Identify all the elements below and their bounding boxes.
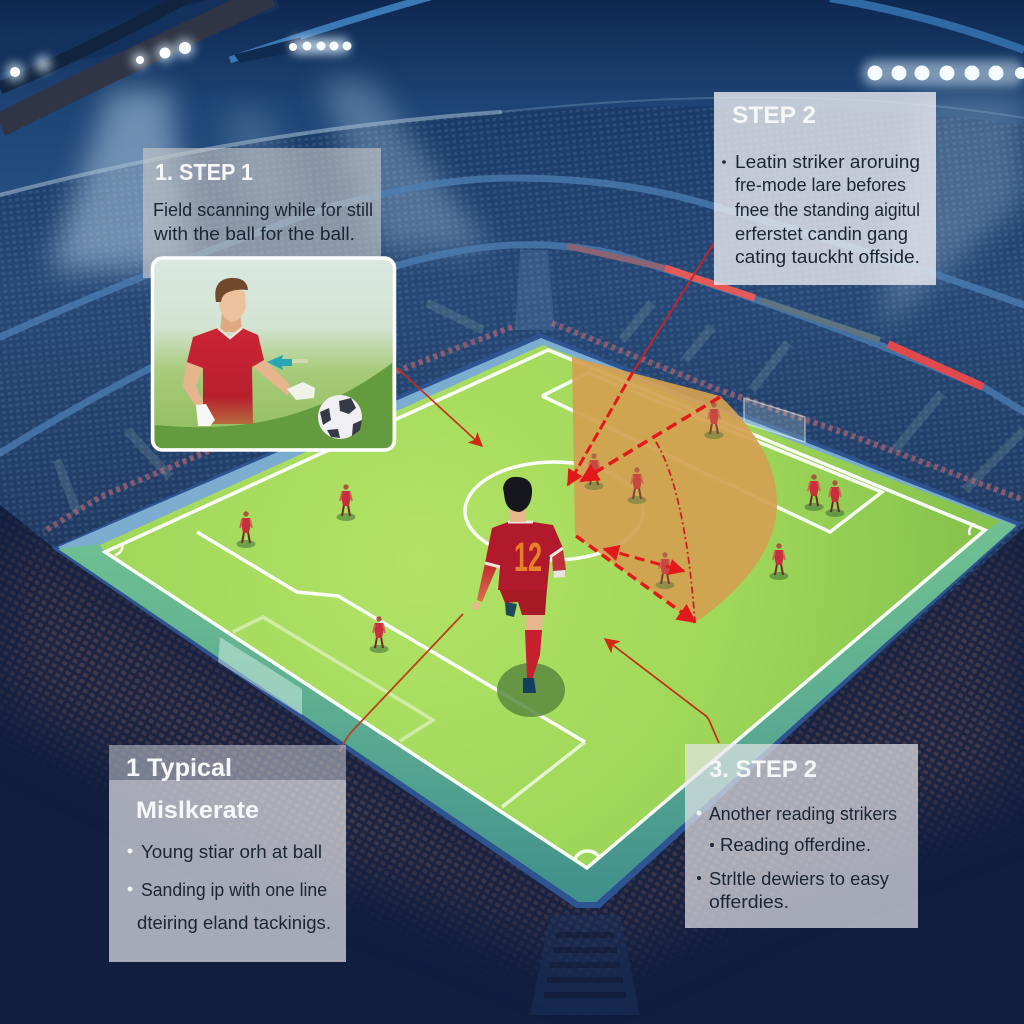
goal bottom left [218, 637, 302, 715]
step 2 bullet and body text: cating tauckht offside. [735, 247, 920, 267]
pitch surround [52, 333, 1022, 908]
wedge players [584, 402, 724, 589]
typical mistake bullets: Sanding ip with one line [141, 880, 327, 900]
typical mistake bullets [128, 842, 331, 933]
shorts [499, 588, 547, 615]
callout arrow from step 3 [605, 639, 719, 743]
panel: step 3 [685, 744, 918, 928]
shirt collar and sleeve trim [485, 522, 563, 567]
grass [100, 345, 1000, 868]
inset teal arrow [267, 355, 308, 370]
stand aisles [57, 303, 1024, 512]
step 2 bullet and body text: fre-mode lare befores [735, 175, 906, 195]
shaded offside wedge [572, 357, 777, 623]
double arrow across wedge [604, 549, 684, 571]
face [219, 288, 246, 322]
typical mistake heading [126, 754, 259, 824]
step 3 heading: 3. STEP 2 [709, 756, 817, 783]
dashed arrow from far player [581, 397, 720, 481]
light beams [50, 80, 1024, 330]
step 2 bullet and body text: Leatin striker aroruing [735, 152, 920, 172]
step 3 bullets: Reading offerdine. [720, 835, 871, 855]
arrow to striker from step 2 panel [633, 243, 714, 372]
central stairway [530, 915, 640, 1015]
goal top right [744, 398, 805, 442]
lower stands seating [0, 505, 1024, 966]
step 1 body text: with the ball for the ball. [153, 224, 355, 244]
step 3 bullets [696, 804, 897, 912]
step 3 bullets: offerdies. [709, 892, 789, 912]
step 1 body text [153, 200, 373, 244]
upper stands seating [0, 106, 1024, 619]
roof struts [0, 0, 1024, 125]
legs and boots [505, 602, 543, 693]
inset: player with ball [152, 258, 394, 450]
football [318, 395, 362, 439]
step 2 bullet and body text: erferstet candin gang [735, 224, 908, 244]
stand tier rings [0, 97, 1024, 453]
gloves [196, 404, 215, 426]
curved offside line [656, 442, 695, 622]
front row seats [43, 323, 1024, 532]
step 1 body text: Field scanning while for still [153, 200, 373, 220]
step 2 bullet and body text: fnee the standing aigitul [735, 200, 920, 220]
small players outfield [236, 474, 844, 653]
inset goalkeeper figure [183, 278, 315, 426]
typical mistake bullets: dteiring eland tackinigs. [137, 913, 331, 933]
number 12: 12 [514, 534, 542, 580]
teal apron [58, 520, 1016, 902]
typical mistake heading: Mislkerate [136, 797, 259, 824]
pitch [52, 333, 1022, 908]
panel: step 1 [143, 148, 381, 278]
floodlights left [6, 38, 352, 81]
step 2 heading: STEP 2 [732, 102, 816, 129]
arms [472, 549, 566, 610]
collar [218, 328, 242, 338]
main player number 12 [472, 477, 566, 717]
panel: step 2 [714, 92, 936, 285]
floodlights right [862, 60, 1024, 86]
callout arrow from typical mistake [340, 614, 463, 752]
player shadow [497, 663, 565, 717]
step 2 bullet and body text [722, 152, 920, 267]
advertising boards [567, 246, 983, 387]
neck and arms [220, 312, 242, 332]
head and hair [503, 477, 532, 522]
typical mistake bullets: Young stiar orh at ball [141, 842, 322, 862]
shirt [187, 328, 264, 424]
pitch markings [105, 350, 985, 868]
step 3 bullets: Strltle dewiers to easy [709, 869, 889, 889]
hair [215, 278, 248, 302]
callout arrow from step 1 [397, 368, 482, 446]
panel: typical mistake [109, 745, 346, 962]
tactical arrows [340, 243, 720, 752]
shirt [485, 522, 563, 590]
step 3 bullets: Another reading strikers [709, 804, 897, 824]
central tunnel glow [515, 250, 555, 330]
inset turf [155, 363, 392, 448]
step 1 heading: 1. STEP 1 [155, 159, 253, 185]
dashed line along wedge edge [576, 536, 695, 622]
typical mistake heading: 1 Typical [126, 754, 232, 782]
